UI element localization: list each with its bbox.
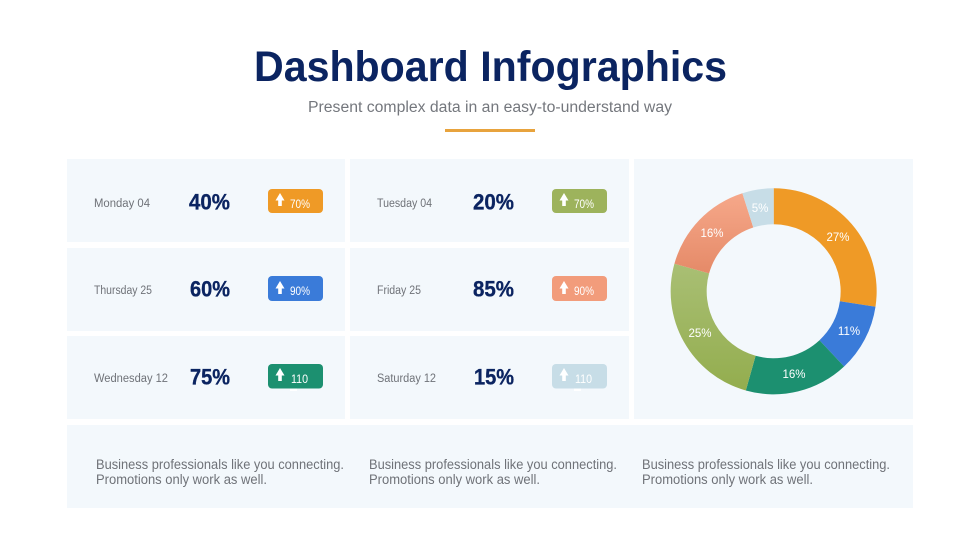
text block: note 1: Promotions only work as well. xyxy=(96,472,267,487)
text block: note 3: Business professionals like you connecting. xyxy=(642,457,890,472)
panel: Thursday 25: 60% xyxy=(190,276,230,302)
text block: note 2: Promotions only work as well. xyxy=(369,472,540,487)
badge: up 110 teal: 110 xyxy=(291,374,308,386)
text block: note 2: Business professionals like you connecting. xyxy=(369,457,617,472)
donut segment: 16% teal: 16% xyxy=(782,369,806,381)
subtitle: Present complex data in an easy-to-understand way xyxy=(308,99,672,116)
title: Dashboard Infographics xyxy=(254,43,727,91)
donut segment: 27% orange: 27% xyxy=(826,232,850,244)
badge: up 110 teal xyxy=(268,364,323,391)
badge: up 110 pale blue xyxy=(552,364,607,391)
panel: Monday 04: Monday 04 xyxy=(94,198,151,210)
donut segment: 27% orange xyxy=(774,188,877,307)
donut segment: 16% salmon: 16% xyxy=(700,228,724,240)
badge: up 90% blue: 90% xyxy=(290,286,310,298)
badge: up 70% orange xyxy=(268,189,323,213)
panel: Saturday 12 xyxy=(350,336,629,419)
donut segment: 5% pale blue xyxy=(742,188,774,228)
panel: Saturday 12: 15% xyxy=(474,364,514,390)
donut segment: 16% teal xyxy=(746,340,844,394)
panel: Tuesday 04: 20% xyxy=(473,190,514,214)
panel: Tuesday 04 xyxy=(350,159,629,242)
panel: Thursday 25: Thursday 25 xyxy=(94,285,152,297)
donut segment: 16% salmon xyxy=(674,193,753,273)
panel: donut chart xyxy=(634,159,913,419)
panel: bottom notes xyxy=(67,425,913,508)
donut segment: 25% green xyxy=(671,264,756,390)
panel: Friday 25: Friday 25 xyxy=(377,285,421,297)
panel: Tuesday 04: Tuesday 04 xyxy=(377,198,433,210)
panel: Friday 25 xyxy=(350,248,629,331)
donut segment: 25% green: 25% xyxy=(688,328,712,340)
badge: up 70% orange: 70% xyxy=(290,199,310,211)
panel: Monday 04: 40% xyxy=(189,190,230,214)
badge: up 70% green: 70% xyxy=(574,199,594,211)
donut segment: 5% pale blue: 5% xyxy=(752,203,768,215)
text block: note 1 xyxy=(96,457,344,487)
panel: Wednesday 12: Wednesday 12 xyxy=(94,373,168,385)
badge: up 90% salmon xyxy=(552,276,607,301)
text block: note 3: Promotions only work as well. xyxy=(642,472,813,487)
badge: up 70% green xyxy=(552,189,607,213)
title underline accent xyxy=(445,129,535,132)
panel: Saturday 12: Saturday 12 xyxy=(377,373,436,385)
donut segment: 11% blue xyxy=(820,301,876,366)
panel: Wednesday 12: 75% xyxy=(190,364,230,390)
text block: note 2 xyxy=(369,457,617,487)
badge: up 90% blue xyxy=(268,276,323,301)
donut segment: 11% blue: 11% xyxy=(838,326,860,338)
text block: note 1: Business professionals like you connecting. xyxy=(96,457,344,472)
panel: Friday 25: 85% xyxy=(473,276,514,302)
panel: Monday 04 xyxy=(67,159,345,242)
panel: Thursday 25 xyxy=(67,248,345,331)
text block: note 3 xyxy=(642,457,890,487)
panel: Wednesday 12 xyxy=(67,336,345,419)
badge: up 110 pale blue: 110 xyxy=(575,374,592,386)
badge: up 90% salmon: 90% xyxy=(574,286,594,298)
